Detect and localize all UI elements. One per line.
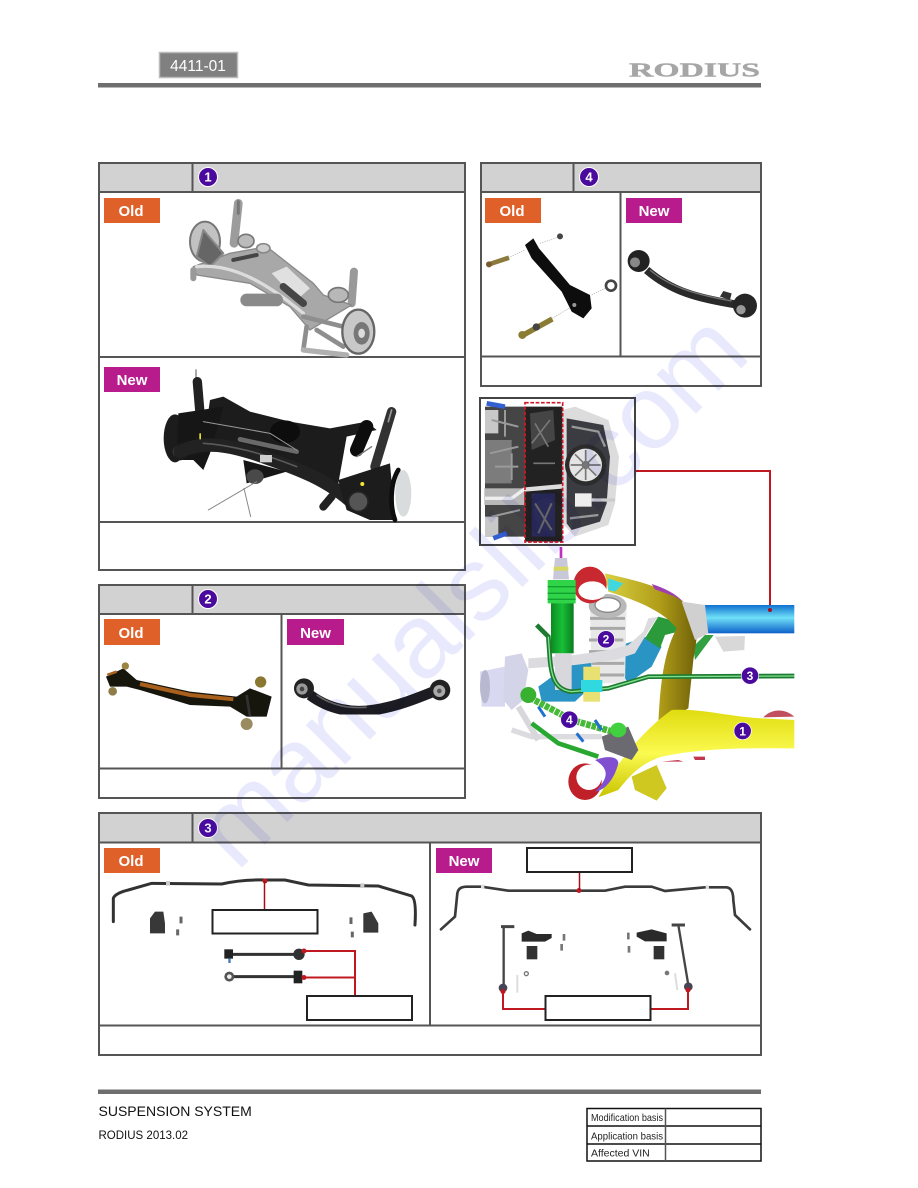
- old subframe image: [190, 202, 374, 355]
- new bar leader line: [576, 872, 582, 893]
- new badge: [104, 367, 160, 392]
- footer title: SUSPENSION SYSTEM: [98, 1103, 252, 1119]
- new badge: New: [639, 203, 670, 220]
- vehicle underside inset: [480, 398, 635, 545]
- new stabilizer parts: [441, 885, 750, 993]
- new badge: [436, 848, 492, 873]
- new bar label box: [527, 848, 632, 872]
- footer rule: [98, 1090, 761, 1094]
- callout 3: 3: [747, 669, 754, 683]
- old bar leader line: [262, 878, 268, 910]
- bottom yellow frame: [598, 710, 794, 801]
- old arm image: [106, 662, 272, 730]
- panel 4: lower arm: [481, 163, 761, 386]
- yellow olive arm: [605, 573, 708, 725]
- badge 3: 3: [204, 820, 212, 836]
- panel 2: upper arm: [99, 585, 465, 798]
- old badge: [485, 198, 541, 223]
- rear mount behind frame: [763, 710, 794, 717]
- new badge: New: [117, 372, 148, 389]
- badge 4: [580, 168, 598, 186]
- callout 3: [741, 667, 759, 684]
- new link label box: [546, 996, 650, 1020]
- main suspension diagram: [480, 547, 794, 801]
- callout 1: 1: [739, 724, 746, 738]
- badge 4: 4: [585, 170, 593, 184]
- old badge: [104, 619, 160, 645]
- old badge: Old: [500, 203, 524, 220]
- new badge: New: [300, 625, 331, 642]
- callout 2: 2: [603, 633, 610, 647]
- revision table: Affected VIN: [591, 1148, 650, 1160]
- upper white arm: [528, 617, 683, 668]
- new link leader lines: [500, 988, 690, 1009]
- badge 2: 2: [204, 592, 212, 606]
- pointer dot: [768, 608, 772, 612]
- cross beam blue: [693, 605, 794, 660]
- stabilizer bushing: [581, 667, 602, 702]
- callout 1: [734, 722, 751, 740]
- old badge: Old: [118, 203, 144, 220]
- new badge: [287, 619, 344, 645]
- panel 1: subframe: [99, 163, 465, 570]
- header code tag: [160, 52, 238, 78]
- header rule: [98, 83, 761, 88]
- old badge: [104, 848, 160, 873]
- callout 4: [561, 711, 578, 728]
- new badge: [626, 198, 682, 223]
- badge 3: [198, 818, 218, 838]
- badge 1: 1: [204, 170, 212, 184]
- lower arms: [512, 707, 602, 757]
- callout 2: [597, 631, 615, 648]
- badge 2: [198, 590, 218, 608]
- old arm with bolts image: [486, 233, 616, 339]
- shock absorber: [548, 547, 576, 690]
- header code tag: 4411-01: [170, 58, 226, 75]
- old bar label box: [212, 910, 318, 934]
- old stabilizer parts: [113, 880, 415, 983]
- RODIUS logo: RODIUS: [629, 60, 760, 82]
- revision table: Application basis: [591, 1130, 663, 1142]
- knuckle and hub: [480, 653, 528, 710]
- old badge: [104, 198, 160, 223]
- footer model date: RODIUS 2013.02: [98, 1130, 188, 1142]
- callout 4: 4: [566, 713, 573, 727]
- old badge: Old: [118, 853, 144, 870]
- watermark: manualslib.com: [170, 290, 769, 889]
- coil spring: [589, 594, 627, 683]
- old link leader lines: [302, 948, 355, 996]
- old badge: Old: [118, 625, 144, 642]
- lower red ring: [568, 757, 618, 800]
- revision table: Modification basis: [591, 1112, 663, 1124]
- control arm teal: [538, 637, 662, 702]
- revision table: [587, 1108, 761, 1161]
- badge 1: [198, 168, 218, 186]
- link arm 4: [520, 687, 638, 760]
- panel 3: stabilizer bar: [99, 813, 761, 1055]
- old link label box: [307, 996, 412, 1020]
- upper red ring: [573, 567, 607, 603]
- new badge: New: [449, 853, 480, 870]
- new arm image: [294, 678, 450, 711]
- connector line to main diagram: [636, 471, 770, 607]
- new arm image: [628, 250, 757, 318]
- stabilizer bar: [537, 625, 794, 692]
- new subframe image: [164, 370, 411, 520]
